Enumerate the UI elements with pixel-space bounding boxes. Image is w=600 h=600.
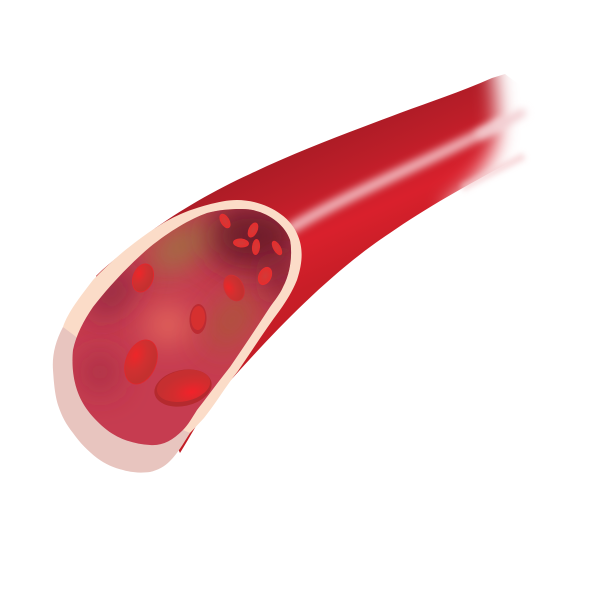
cell large bottom — [151, 364, 215, 412]
small far cells — [217, 212, 233, 230]
faded lower edge — [462, 156, 524, 188]
lumen shading: right dark edge — [270, 252, 294, 304]
lumen shading: dark rim top left — [82, 262, 142, 322]
cell far right — [255, 265, 275, 287]
cell upper right — [220, 272, 248, 304]
lumen shading: olive glow — [142, 215, 218, 279]
faded end of vessel — [446, 30, 600, 250]
lumen shading: darker patch left — [84, 354, 116, 390]
lumen shading: amber right — [205, 291, 258, 350]
lumen shading: dark far end — [204, 202, 300, 270]
cut wall: cream ring — [63, 200, 302, 433]
cell medium centre — [189, 304, 207, 334]
cell large left — [118, 335, 164, 389]
vessel wall: outer red tube — [96, 74, 528, 453]
highlight streak — [292, 124, 500, 228]
cut wall: pink lower section — [53, 327, 190, 473]
red blood cells — [118, 212, 284, 412]
cell upper left — [129, 261, 157, 295]
illustration: blood vessel cross-section — [52, 74, 528, 473]
faded highlight tip — [480, 113, 522, 134]
lumen shading: salmon centre — [148, 309, 188, 341]
lumen: interior of vessel — [72, 209, 292, 446]
